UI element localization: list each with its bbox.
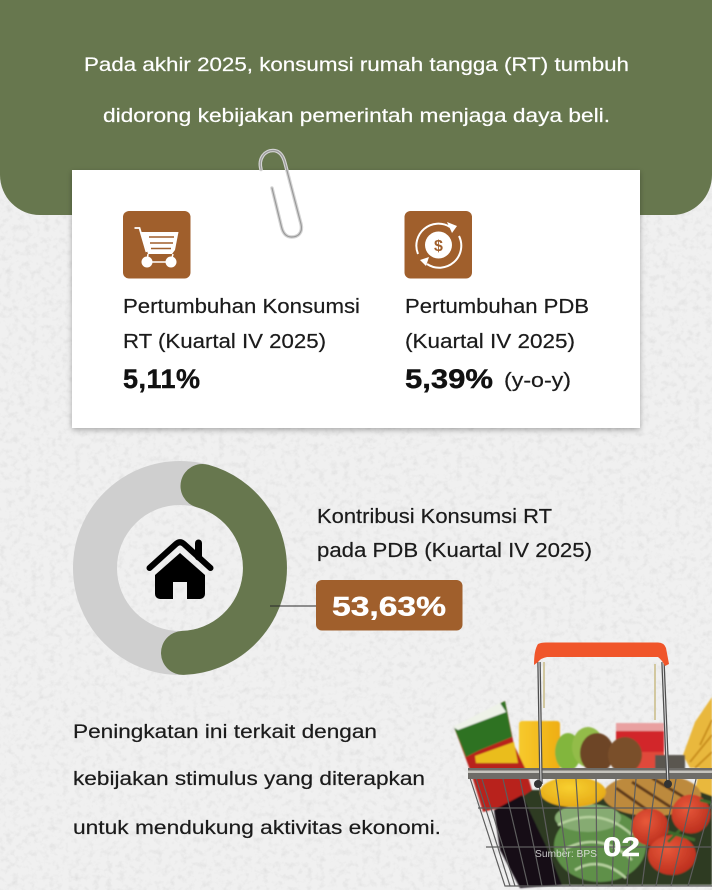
body text: kebijakan stimulus yang diterapkan xyxy=(73,769,425,790)
loaf xyxy=(603,774,701,816)
dark eggplant xyxy=(494,795,562,888)
consumption growth text: Pertumbuhan Konsumsi xyxy=(123,296,360,318)
header text: Pada akhir 2025, konsumsi rumah tangga (RT) tumbuh xyxy=(84,54,629,76)
apples xyxy=(555,733,581,771)
pasta xyxy=(683,697,712,796)
page number: 02 xyxy=(603,832,640,862)
lemon xyxy=(540,777,606,807)
lettuce xyxy=(554,810,646,882)
consumption growth text: 5,11% xyxy=(123,364,200,394)
contribution label: pada PDB (Kuartal IV 2025) xyxy=(317,540,592,562)
GDP growth text: 5,39% xyxy=(405,364,493,394)
value badge: 53,63% xyxy=(332,592,446,622)
source note: Sumber: BPS xyxy=(535,848,597,860)
bottle xyxy=(519,721,560,771)
basket handle xyxy=(534,642,672,788)
contribution label xyxy=(317,506,592,562)
header text: didorong kebijakan pemerintah menjaga daya beli. xyxy=(103,105,610,127)
header banner xyxy=(0,0,712,215)
icon: shopping cart xyxy=(123,211,190,278)
contribution label: Kontribusi Konsumsi RT xyxy=(317,506,552,528)
consumption growth text: RT (Kuartal IV 2025) xyxy=(123,331,326,353)
consumption growth text xyxy=(123,296,360,394)
connector line xyxy=(270,605,318,607)
icon: house xyxy=(150,542,210,599)
icon: dollar cycle xyxy=(404,211,472,278)
header text xyxy=(84,54,629,127)
basket wires xyxy=(470,778,712,886)
jar xyxy=(616,723,664,767)
illustration: grocery basket xyxy=(453,642,712,888)
chart: donut of consumption share xyxy=(95,483,265,653)
bread rolls xyxy=(580,733,614,773)
icon: dollar cycle: $ xyxy=(434,238,443,255)
tomatoes xyxy=(632,808,668,846)
package xyxy=(454,701,532,812)
icon: paperclip xyxy=(260,150,301,237)
body text: Peningkatan ini terkait dengan xyxy=(73,722,377,743)
body text: untuk mendukung aktivitas ekonomi. xyxy=(73,818,441,839)
GDP growth text: Pertumbuhan PDB xyxy=(405,296,589,318)
dark basket interior xyxy=(500,790,712,885)
basket rim xyxy=(468,768,712,779)
panel: growth statistics card xyxy=(72,170,640,428)
GDP growth text xyxy=(405,296,589,394)
value badge xyxy=(316,580,462,630)
GDP growth text: (Kuartal IV 2025) xyxy=(405,331,575,353)
GDP growth text: (y-o-y) xyxy=(504,370,571,392)
body text xyxy=(73,722,441,839)
